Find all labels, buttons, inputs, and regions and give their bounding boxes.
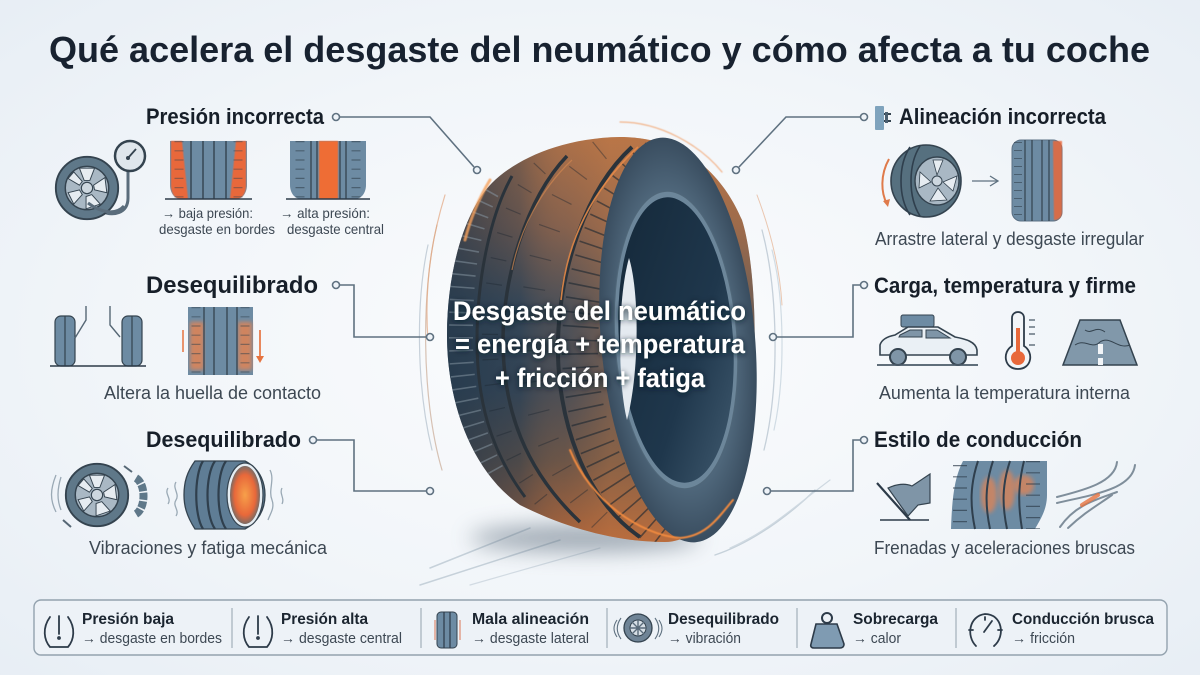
panel: desequilibrado vibraciones bbox=[52, 427, 328, 558]
heading: Estilo de conducción bbox=[874, 427, 1082, 452]
icon: foot on pedal bbox=[877, 474, 930, 520]
summary item: presión alta bbox=[281, 611, 402, 647]
icon: thermometer bbox=[1006, 312, 1035, 369]
summary item: presión alta: → desgaste central bbox=[281, 631, 402, 647]
heading: Carga, temperatura y firme bbox=[874, 273, 1136, 298]
central tire illustration bbox=[419, 122, 830, 585]
central formula text: Desgaste del neumático bbox=[453, 296, 746, 326]
heading: Desequilibrado bbox=[146, 272, 318, 299]
captions: → baja presión: bbox=[162, 205, 253, 221]
caption: Frenadas y aceleraciones bruscas bbox=[874, 538, 1135, 558]
icon: low pressure tread bbox=[165, 141, 252, 199]
summary item: sobrecarga: Sobrecarga bbox=[853, 611, 938, 628]
panel: desequilibrado huella bbox=[50, 272, 321, 403]
arrow bbox=[972, 176, 998, 186]
summary item: mala alineación: Mala alineación bbox=[472, 611, 589, 628]
summary item: presión baja bbox=[82, 611, 222, 647]
tread grooves and sipes bbox=[461, 147, 672, 540]
summary item: conducción brusca bbox=[1012, 611, 1154, 647]
motion arcs and road streaks bbox=[419, 195, 830, 585]
summary item: desequilibrado bbox=[668, 611, 779, 647]
summary item: sobrecarga: → calor bbox=[853, 631, 901, 647]
icon: speedometer bbox=[969, 614, 1002, 646]
rim ring bbox=[605, 187, 747, 493]
panel: presión incorrecta: desgaste central bbox=[287, 221, 384, 237]
caption: Aumenta la temperatura interna bbox=[879, 383, 1131, 403]
icon: vibrating wheel bbox=[614, 614, 662, 642]
heading: Desequilibrado bbox=[146, 427, 301, 452]
panel: presión incorrecta bbox=[56, 104, 384, 237]
summary item: presión alta: Presión alta bbox=[281, 611, 368, 628]
title: Qué acelera el desgaste del neumático y cómo afecta a tu coche bbox=[49, 29, 1150, 70]
heading: Presión incorrecta bbox=[146, 104, 325, 129]
connector lines bbox=[310, 114, 868, 494]
central formula text: + fricción + fatiga bbox=[495, 363, 706, 393]
panel: estilo de conducción bbox=[874, 427, 1135, 558]
summary item: sobrecarga bbox=[853, 611, 938, 647]
icon: vibrating tire with hot core bbox=[167, 461, 283, 529]
summary item: desequilibrado: Desequilibrado bbox=[668, 611, 779, 628]
icon: high pressure warning bbox=[244, 616, 272, 647]
wheel opening bbox=[609, 193, 743, 487]
shadow below tire bbox=[470, 524, 700, 552]
caption: Altera la huella de contacto bbox=[104, 383, 321, 403]
panel: presión incorrecta: desgaste en bordes bbox=[159, 221, 275, 237]
icon: skewed wheel bbox=[882, 145, 961, 217]
tread body bbox=[447, 137, 755, 542]
caption: Vibraciones y fatiga mecánica bbox=[89, 538, 328, 558]
background visible through tire bbox=[620, 258, 637, 420]
panel: presión incorrecta: → alta presión: bbox=[280, 205, 370, 221]
glowing friction lines bbox=[465, 122, 733, 538]
icon: low pressure warning bbox=[45, 616, 73, 647]
icon: skid marks bbox=[1057, 462, 1135, 528]
caption: Arrastre lateral y desgaste irregular bbox=[875, 229, 1144, 249]
summary item: conducción brusca: Conducción brusca bbox=[1012, 611, 1154, 628]
summary item: mala alineación bbox=[472, 611, 589, 647]
heading: Alineación incorrecta bbox=[899, 104, 1107, 129]
panel: alineación incorrecta bbox=[875, 104, 1144, 249]
icon: high pressure tread bbox=[286, 141, 370, 199]
icon: tread with lateral wear bbox=[1012, 140, 1062, 221]
summary item: presión baja: → desgaste en bordes bbox=[82, 631, 222, 647]
icon: weight bbox=[811, 613, 844, 648]
sidewall bbox=[584, 131, 772, 549]
summary item: desequilibrado: → vibración bbox=[668, 631, 741, 647]
central formula text: = energía + temperatura bbox=[455, 329, 746, 359]
icon: misaligned tire bbox=[435, 612, 460, 648]
icon: tire with patchy wear bbox=[951, 461, 1047, 529]
icon: rough road bbox=[1063, 320, 1137, 365]
icon: alignment bracket bbox=[875, 106, 891, 130]
summary item: mala alineación: → desgaste lateral bbox=[472, 631, 589, 647]
icon: wheel with weights bbox=[52, 464, 144, 527]
icon: tilted tires bbox=[50, 306, 146, 366]
panel: carga, temperatura y firme bbox=[874, 273, 1137, 403]
icon: loaded car bbox=[877, 315, 978, 365]
summary item: presión baja: Presión baja bbox=[82, 611, 174, 628]
panel: summary bar bbox=[34, 600, 1167, 655]
central formula text bbox=[453, 296, 746, 393]
icon: wheel with pressure gauge bbox=[56, 141, 145, 219]
summary item: conducción brusca: → fricción bbox=[1012, 631, 1075, 647]
icon: tread with shifted footprint bbox=[183, 307, 264, 375]
